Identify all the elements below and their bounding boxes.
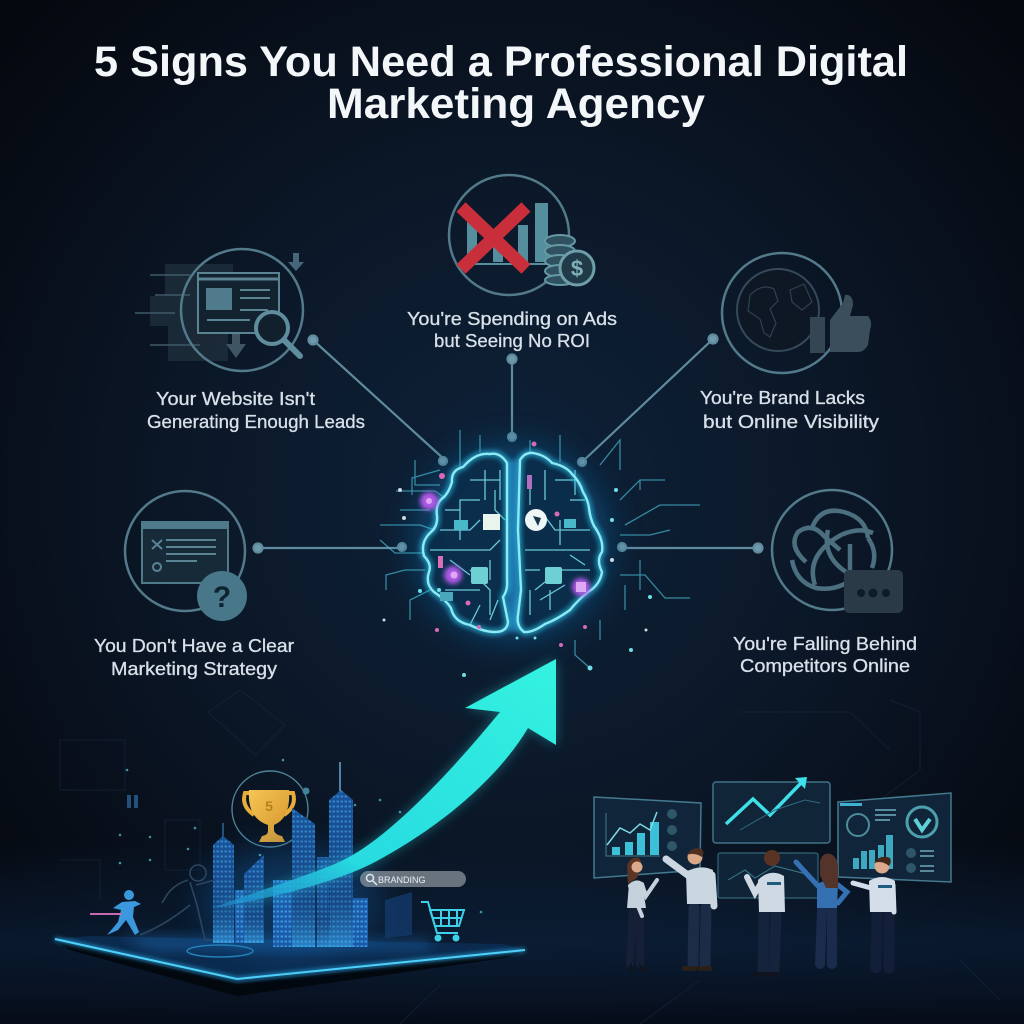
glowing outline xyxy=(423,453,602,632)
icon: no ad ROI xyxy=(449,175,594,295)
text: competitors: Competitors Online xyxy=(740,655,910,676)
growth arrow xyxy=(213,659,556,908)
text: brand visibility: You're Brand Lacks xyxy=(700,387,865,408)
text: website leads: Your Website Isn't xyxy=(156,388,315,409)
text: no strategy: Marketing Strategy xyxy=(111,658,278,679)
chips and nodes xyxy=(483,514,500,530)
person 1 xyxy=(627,858,657,973)
platform and holographic city xyxy=(55,762,525,996)
text: no strategy: You Don't Have a Clear xyxy=(94,635,294,656)
title: 5 Signs You Need a Professional Digital xyxy=(94,38,908,86)
search bar: BRANDING xyxy=(378,875,426,885)
icon: website with magnifier xyxy=(135,249,304,371)
text: website leads: Generating Enough Leads xyxy=(147,411,365,432)
outline runner xyxy=(140,865,215,940)
dashboard centre top xyxy=(713,777,830,843)
search bar xyxy=(360,871,466,887)
person 3 xyxy=(747,850,785,976)
dashboard right xyxy=(838,793,951,882)
person 5 xyxy=(853,857,895,968)
blue runner xyxy=(107,890,141,935)
icon: no ad ROI: $ xyxy=(571,256,583,281)
icon: tangled arrows with chat box xyxy=(772,490,903,613)
inner circuit traces xyxy=(430,470,590,625)
dashboard left xyxy=(594,797,701,878)
text: ad spend: You're Spending on Ads xyxy=(407,308,617,329)
trophy: 5 xyxy=(265,798,273,814)
person 4 xyxy=(796,854,847,964)
title: Marketing Agency xyxy=(327,80,705,128)
icon: globe with thumbs up xyxy=(722,253,871,373)
outer circuit traces xyxy=(380,430,700,668)
connector lines xyxy=(254,334,762,552)
brain illustration xyxy=(380,430,700,677)
trophy xyxy=(232,771,310,847)
scattered particles xyxy=(119,759,482,913)
icon: strategy window with question mark: ? xyxy=(213,581,231,614)
platform xyxy=(55,935,525,996)
team and holographic dashboards xyxy=(594,777,951,976)
person 2 xyxy=(666,848,714,971)
buildings xyxy=(200,762,412,955)
dashboard centre lower xyxy=(718,853,818,898)
text: brand visibility: but Online Visibility xyxy=(703,411,880,432)
text: ad spend: but Seeing No ROI xyxy=(434,330,590,351)
text: competitors: You're Falling Behind xyxy=(733,633,917,654)
icon: strategy window with question mark xyxy=(125,491,247,621)
shopping cart xyxy=(421,902,464,940)
